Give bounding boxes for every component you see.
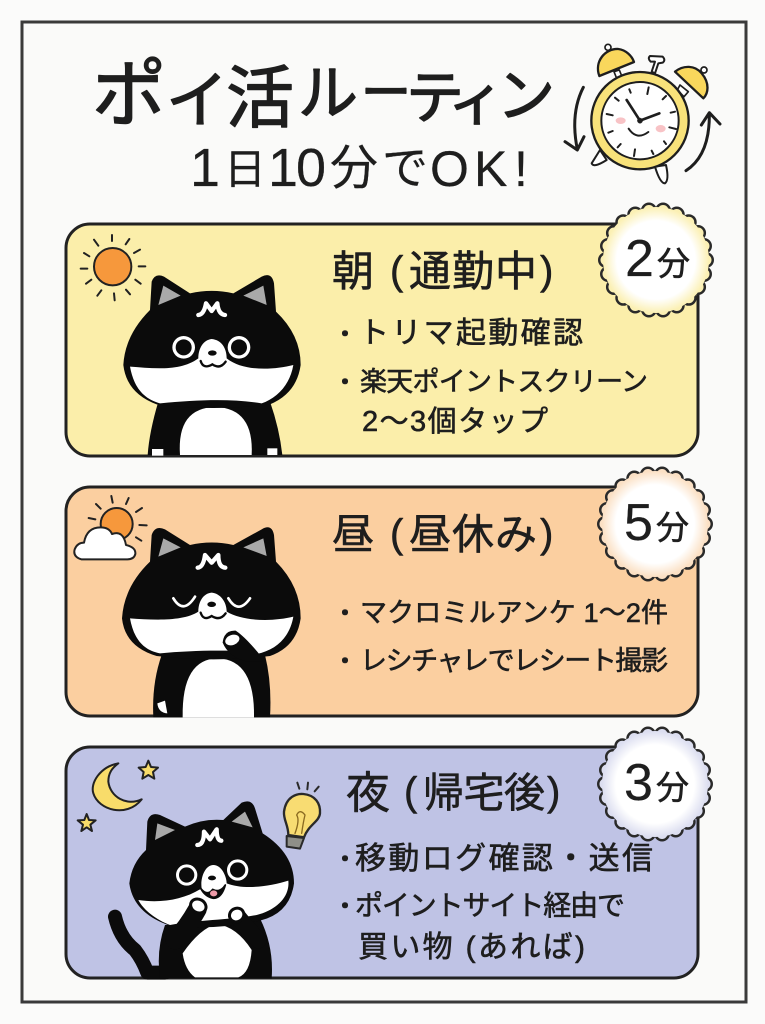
character: cat, night — [115, 801, 294, 978]
panel: noon — [66, 471, 708, 717]
heading: night: ) — [547, 770, 560, 814]
title: ル — [298, 45, 358, 132]
icon: sun behind cloud — [74, 496, 147, 559]
title: ー — [361, 53, 411, 125]
list: night tasks: ・ — [332, 891, 358, 921]
list: morning tasks: 楽天ポイントスクリーン — [360, 367, 648, 397]
title: ン — [497, 49, 555, 133]
list: noon tasks: ・ — [332, 646, 358, 676]
subtitle: 1 — [268, 138, 298, 198]
badge: 5 minutes — [602, 471, 708, 577]
panel: night — [66, 731, 708, 978]
list: morning tasks: 2～3個タップ — [362, 406, 548, 438]
heading: morning: ( — [390, 249, 404, 293]
list: night tasks: ポイントサイト経由で — [355, 890, 625, 921]
badge: 3 minutes: 分 — [656, 769, 689, 806]
heading: noon: 昼 — [332, 511, 374, 558]
subtitle: ! — [514, 141, 528, 197]
title: ィ — [448, 56, 504, 137]
heading: morning: 通勤中 — [409, 248, 537, 295]
panel background: noon — [66, 487, 698, 716]
badge: 3 minutes: 3 — [624, 754, 653, 812]
list: morning tasks — [332, 317, 648, 438]
list: noon tasks — [332, 598, 668, 676]
icon: light bulb — [284, 783, 320, 849]
list: noon tasks: マクロミルアンケ 1～2件 — [360, 598, 668, 628]
heading: noon: ( — [390, 512, 404, 556]
list: night tasks: 買い物 (あれば) — [358, 931, 585, 964]
list: morning tasks: ・ — [332, 319, 358, 349]
heading: morning: ) — [540, 249, 553, 293]
icon: sun — [81, 235, 145, 300]
icon: alarm clock — [565, 44, 720, 183]
badge: 2 minutes — [603, 207, 709, 313]
badge: 2 minutes: 2 — [625, 230, 654, 288]
panel: morning — [66, 207, 709, 456]
badge: 3 minutes — [602, 731, 708, 837]
icon: moon and stars — [78, 761, 158, 831]
list: night tasks: ・ — [332, 844, 358, 874]
subtitle: K — [474, 141, 507, 197]
badge: 5 minutes: 分 — [656, 509, 689, 546]
character: cat, morning — [123, 275, 301, 456]
heading: morning: 朝 — [332, 248, 374, 295]
heading: noon: 昼休み — [409, 511, 537, 558]
heading: night: 夜 — [346, 769, 390, 818]
panel background: morning — [66, 224, 698, 456]
list: noon tasks: ・ — [332, 598, 358, 628]
subtitle: O — [430, 141, 469, 197]
heading: noon: ) — [540, 512, 553, 556]
character: cat, noon — [122, 527, 301, 717]
title: イ — [166, 50, 228, 140]
panel background: night — [66, 747, 698, 978]
list: morning tasks: トリマ起動確認 — [359, 317, 583, 350]
list: morning tasks: ・ — [332, 367, 358, 397]
list: noon tasks: レシチャレでレシート撮影 — [360, 646, 668, 676]
title: ポ — [92, 35, 166, 142]
heading: night: ( — [404, 770, 418, 814]
title: テ — [406, 51, 464, 135]
badge: 2 minutes: 分 — [657, 245, 690, 282]
subtitle: 分 — [330, 128, 378, 198]
subtitle: 0 — [296, 138, 326, 198]
subtitle: で — [382, 132, 428, 198]
heading: night: 帰宅後 — [423, 770, 545, 816]
subtitle: 日 — [224, 136, 266, 197]
list: night tasks — [332, 841, 653, 964]
list: night tasks: 移動ログ確認・送信 — [355, 841, 653, 876]
subtitle: 1 — [190, 138, 220, 198]
badge: 5 minutes: 5 — [624, 494, 653, 552]
title: 活 — [226, 43, 294, 142]
